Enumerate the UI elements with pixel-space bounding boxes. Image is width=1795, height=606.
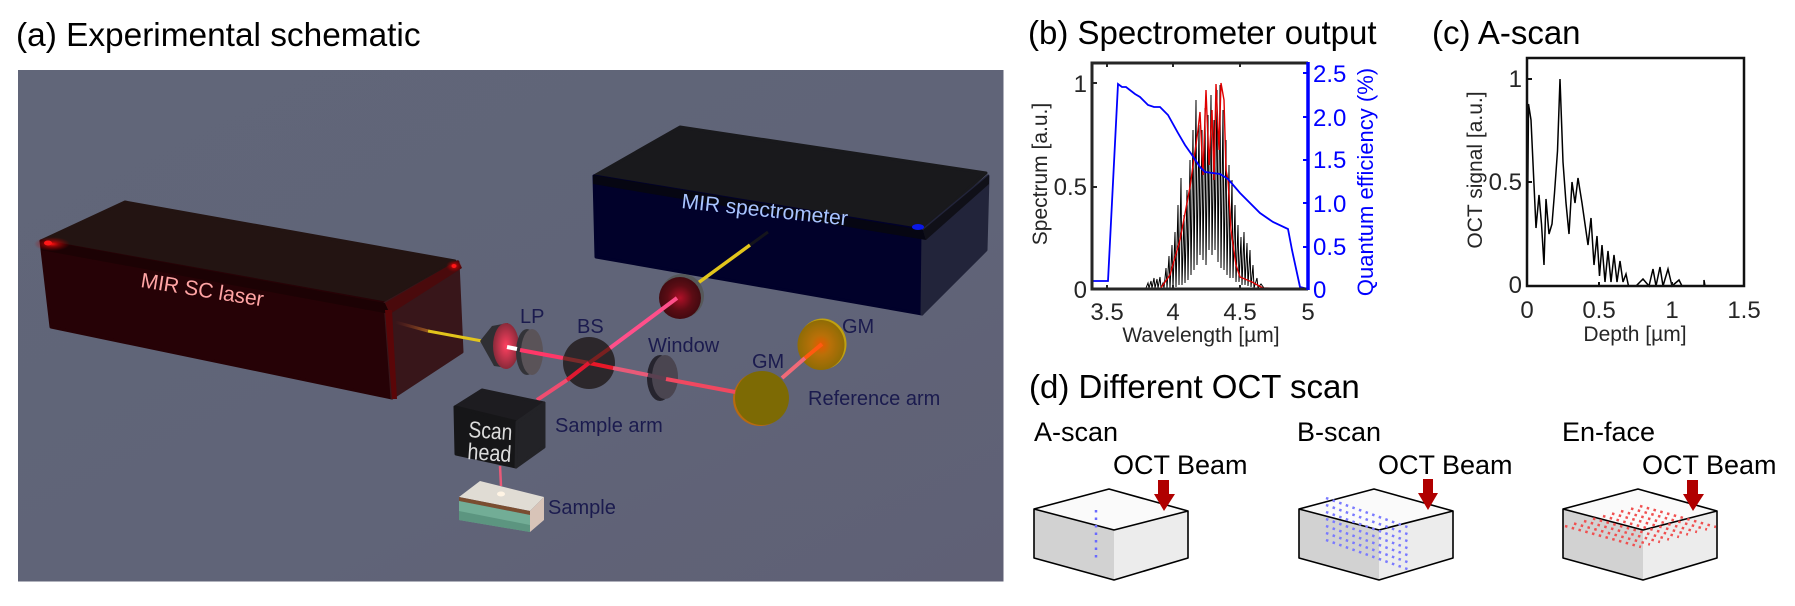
sample block xyxy=(459,481,544,532)
wavelength tick labels: 4 xyxy=(1166,299,1180,326)
beam arrow xyxy=(1418,479,1438,510)
scan head: head xyxy=(467,438,512,467)
beam arrow xyxy=(1683,480,1704,511)
panel: experimental schematic xyxy=(18,70,1004,582)
left tick labels: 0.5 xyxy=(1054,174,1087,201)
x axis label: Wavelength [µm] xyxy=(1122,324,1280,347)
OCT signal trace xyxy=(1527,79,1744,286)
axes xyxy=(1092,62,1308,290)
MIR spectrometer box xyxy=(593,127,989,314)
laser label: MIR SC laser xyxy=(139,269,265,311)
cube xyxy=(1299,489,1453,580)
depth tick labels: 0 xyxy=(1520,297,1534,324)
scan points xyxy=(1095,510,1097,562)
component labels: GM xyxy=(842,316,874,338)
wavelength tick labels: 5 xyxy=(1301,299,1315,326)
component labels: GM xyxy=(752,351,784,373)
quantum efficiency tick labels: 0 xyxy=(1313,277,1326,304)
signal tick labels: 1 xyxy=(1509,66,1522,93)
scan head label: Scan xyxy=(468,416,513,445)
beam: yellow input fibre xyxy=(395,232,768,341)
wavelength tick labels xyxy=(1090,299,1315,326)
spectrum trace xyxy=(1092,85,1308,288)
quantum efficiency tick labels: 2.5 xyxy=(1313,61,1346,88)
quantum efficiency tick labels: 2.0 xyxy=(1313,105,1346,132)
beam arrow xyxy=(1154,480,1175,511)
component labels: Sample xyxy=(548,497,616,519)
component labels: BS xyxy=(577,316,604,338)
heading: A-scan xyxy=(1034,417,1118,447)
title: spectrometer output: (b) Spectrometer output xyxy=(1028,14,1376,51)
signal axis label: OCT signal [a.u.] xyxy=(1464,91,1487,249)
optic: window xyxy=(647,355,678,401)
diagram: B-scan cube xyxy=(1297,417,1513,580)
depth axis label: Depth [µm] xyxy=(1583,323,1687,346)
depth tick labels xyxy=(1520,297,1761,324)
spectrometer label: MIR spectrometer xyxy=(680,190,849,230)
title: A-scan: (c) A-scan xyxy=(1432,14,1581,51)
signal tick labels: 0 xyxy=(1509,272,1522,299)
left axis label: Spectrum [a.u.] xyxy=(1029,103,1052,245)
quantum efficiency tick labels: 1.0 xyxy=(1313,191,1346,218)
cube xyxy=(1563,489,1717,580)
axes xyxy=(1527,58,1744,286)
quantum efficiency trace xyxy=(1092,84,1308,289)
optic: galvo mirror 1 xyxy=(733,371,789,426)
component labels: LP xyxy=(520,306,544,328)
wavelength tick labels: 4.5 xyxy=(1223,299,1257,326)
cube xyxy=(1034,489,1188,580)
left tick labels xyxy=(1054,71,1087,304)
optic: beam splitter xyxy=(563,337,615,389)
component labels: Reference arm xyxy=(808,388,940,410)
left tick labels: 1 xyxy=(1074,71,1087,98)
wavelength tick labels: 3.5 xyxy=(1090,299,1124,326)
beam label: OCT Beam xyxy=(1113,450,1248,480)
beams: pink optical paths xyxy=(500,298,822,486)
component labels xyxy=(520,306,940,519)
quantum efficiency tick labels: 0.5 xyxy=(1313,234,1346,261)
beam label: OCT Beam xyxy=(1378,450,1513,480)
heading: B-scan xyxy=(1297,417,1381,447)
component labels: Sample arm xyxy=(555,415,663,437)
scan points xyxy=(1565,506,1716,547)
title: different OCT scan: (d) Different OCT scan xyxy=(1029,368,1360,405)
left tick labels: 0 xyxy=(1074,277,1087,304)
MIR SC laser box xyxy=(34,202,462,399)
signal tick labels xyxy=(1489,66,1522,299)
optic: return mirror xyxy=(659,274,704,319)
optic: parabolic collimator xyxy=(480,323,519,369)
depth tick labels: 0.5 xyxy=(1582,297,1616,324)
quantum efficiency tick labels: 1.5 xyxy=(1313,147,1346,174)
title: experimental schematic: (a) Experimental schematic xyxy=(16,17,421,54)
envelope trace xyxy=(1092,83,1308,289)
depth tick labels: 1 xyxy=(1665,297,1679,324)
scan head xyxy=(455,390,544,467)
diagram: En-face cube xyxy=(1562,417,1777,580)
signal tick labels: 0.5 xyxy=(1489,169,1522,196)
chart: spectrometer output xyxy=(1029,61,1378,347)
diagram: A-scan cube xyxy=(1034,417,1248,580)
optic: galvo mirror 2 xyxy=(798,318,846,370)
depth tick labels: 1.5 xyxy=(1727,297,1761,324)
right axis label: Quantum efficiency (%) xyxy=(1353,68,1378,296)
beam label: OCT Beam xyxy=(1642,450,1777,480)
quantum efficiency tick labels xyxy=(1313,61,1346,304)
chart: A-scan xyxy=(1464,58,1761,346)
scan points xyxy=(1326,498,1410,570)
component labels: Window xyxy=(648,335,720,357)
heading: En-face xyxy=(1562,417,1655,447)
optic: LP filter xyxy=(516,329,543,375)
